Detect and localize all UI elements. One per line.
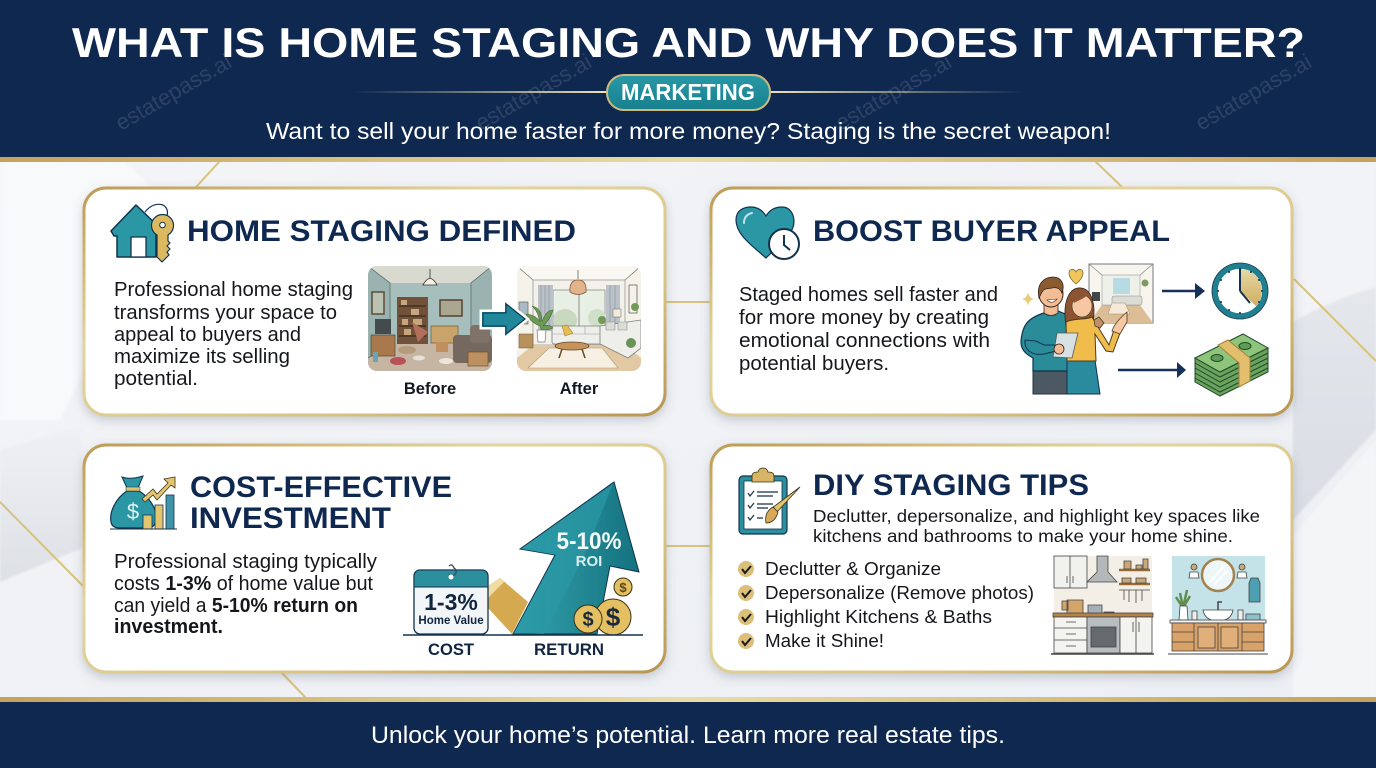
decorative gold lines bbox=[0, 161, 1376, 698]
arrow: to money bbox=[1118, 362, 1186, 378]
sparkle bbox=[1022, 292, 1034, 306]
body text: investment. bbox=[114, 616, 223, 638]
body text: emotional connections with bbox=[739, 330, 990, 352]
check item: highlight: Highlight Kitchens & Baths bbox=[765, 607, 992, 627]
body text: Professional home staging bbox=[114, 279, 353, 301]
calendar card: 1-3% home value: 1-3% bbox=[424, 589, 478, 615]
category tag: marketing: MARKETING bbox=[621, 79, 755, 105]
body text: potential. bbox=[114, 368, 198, 390]
label: before: Before bbox=[404, 380, 456, 398]
body text: Staged homes sell faster and bbox=[739, 284, 998, 306]
chart: cost versus return bbox=[403, 482, 643, 659]
intro text: Declutter, depersonalize, and highlight key spaces like bbox=[813, 506, 1260, 526]
coins: $ bbox=[582, 609, 594, 631]
panel: boost buyer appeal bbox=[711, 188, 1292, 415]
intro text: kitchens and bathrooms to make your home shine. bbox=[813, 526, 1233, 546]
arrow: to clock bbox=[1162, 283, 1205, 299]
body text bbox=[739, 284, 998, 375]
panel: home staging defined bbox=[84, 188, 665, 415]
gold chevron connector bbox=[488, 578, 528, 634]
watermarks: estatepass.ai bbox=[471, 49, 596, 135]
arrow: before to after bbox=[482, 302, 526, 336]
check item: depersonalize: Depersonalize (Remove photos) bbox=[765, 583, 1034, 603]
woman bbox=[1065, 288, 1127, 394]
heading: BOOST BUYER APPEAL bbox=[813, 215, 1170, 248]
big teal return arrow: 5-10% bbox=[556, 528, 622, 555]
panel: DIY staging tips bbox=[711, 445, 1292, 672]
arrow outline bbox=[483, 304, 525, 334]
watermarks: estatepass.ai bbox=[1191, 49, 1316, 135]
footer band bbox=[0, 697, 1376, 768]
body text: for more money by creating bbox=[739, 307, 989, 329]
man's hand bbox=[1054, 344, 1064, 354]
illustration: couple viewing a room bbox=[1021, 264, 1153, 394]
body text: maximize its selling bbox=[114, 346, 290, 368]
illustration: bathroom bbox=[1168, 556, 1268, 654]
header band bbox=[0, 0, 1376, 162]
body text: transforms your space to bbox=[114, 302, 337, 324]
label: cost: COST bbox=[428, 640, 475, 659]
illustration: cluttered room before bbox=[368, 266, 492, 371]
footer text: Unlock your home’s potential. Learn more real estate tips. bbox=[371, 722, 1005, 749]
check item: declutter: Declutter & Organize bbox=[765, 559, 941, 579]
icon: clipboard and brush bbox=[739, 468, 800, 534]
icon: money bag with growth chart bbox=[110, 476, 177, 529]
heading bbox=[190, 471, 452, 535]
subtitle: Want to sell your home faster for more money? Staging is the secret weapon! bbox=[266, 118, 1111, 144]
body text: costs 1-3% of home value but bbox=[114, 573, 373, 595]
page background bbox=[0, 160, 1376, 700]
coins: $ bbox=[606, 602, 621, 632]
tablet bbox=[1053, 333, 1078, 358]
heading: HOME STAGING DEFINED bbox=[187, 215, 576, 248]
heading: INVESTMENT bbox=[190, 502, 391, 535]
body text: potential buyers. bbox=[739, 353, 889, 375]
title: WHAT IS HOME STAGING AND WHY DOES IT MATTER? bbox=[72, 19, 1305, 66]
icon: stack of money bbox=[1195, 334, 1268, 396]
calendar card: 1-3% home value bbox=[414, 565, 488, 634]
icon: clock bbox=[1212, 263, 1268, 319]
illustration: kitchen bbox=[1051, 556, 1154, 654]
icon: house and key bbox=[111, 204, 174, 262]
label: return: RETURN bbox=[534, 640, 604, 659]
room picture bbox=[1089, 264, 1153, 323]
label: after: After bbox=[560, 380, 599, 398]
body text: appeal to buyers and bbox=[114, 324, 301, 346]
icon: heart and clock bbox=[736, 207, 799, 259]
big teal return arrow bbox=[513, 482, 639, 634]
heart above couple bbox=[1069, 269, 1083, 284]
coins bbox=[574, 578, 632, 635]
watermarks bbox=[111, 49, 1316, 135]
checklist bbox=[738, 559, 1034, 651]
intro text bbox=[813, 506, 1260, 546]
icon: money bag with growth chart: $ bbox=[127, 499, 139, 524]
panel: cost-effective investment bbox=[84, 445, 665, 672]
category tag: marketing bbox=[352, 75, 1025, 110]
big teal return arrow: ROI bbox=[576, 553, 602, 570]
man's forearm holding tablet bbox=[1025, 340, 1056, 354]
man bbox=[1021, 277, 1070, 394]
watermarks: estatepass.ai bbox=[111, 49, 236, 135]
body text bbox=[114, 279, 353, 390]
illustration: staged room after bbox=[517, 266, 641, 371]
watermarks: estatepass.ai bbox=[831, 49, 956, 135]
heading: COST-EFFECTIVE bbox=[190, 471, 452, 504]
body text: can yield a 5-10% return on bbox=[114, 595, 358, 617]
body text bbox=[114, 551, 377, 638]
calendar card: 1-3% home value: Home Value bbox=[418, 615, 484, 627]
coins: $ bbox=[619, 580, 627, 595]
check item: shine: Make it Shine! bbox=[765, 631, 884, 651]
body text: Professional staging typically bbox=[114, 551, 377, 573]
heading: DIY STAGING TIPS bbox=[813, 469, 1089, 502]
